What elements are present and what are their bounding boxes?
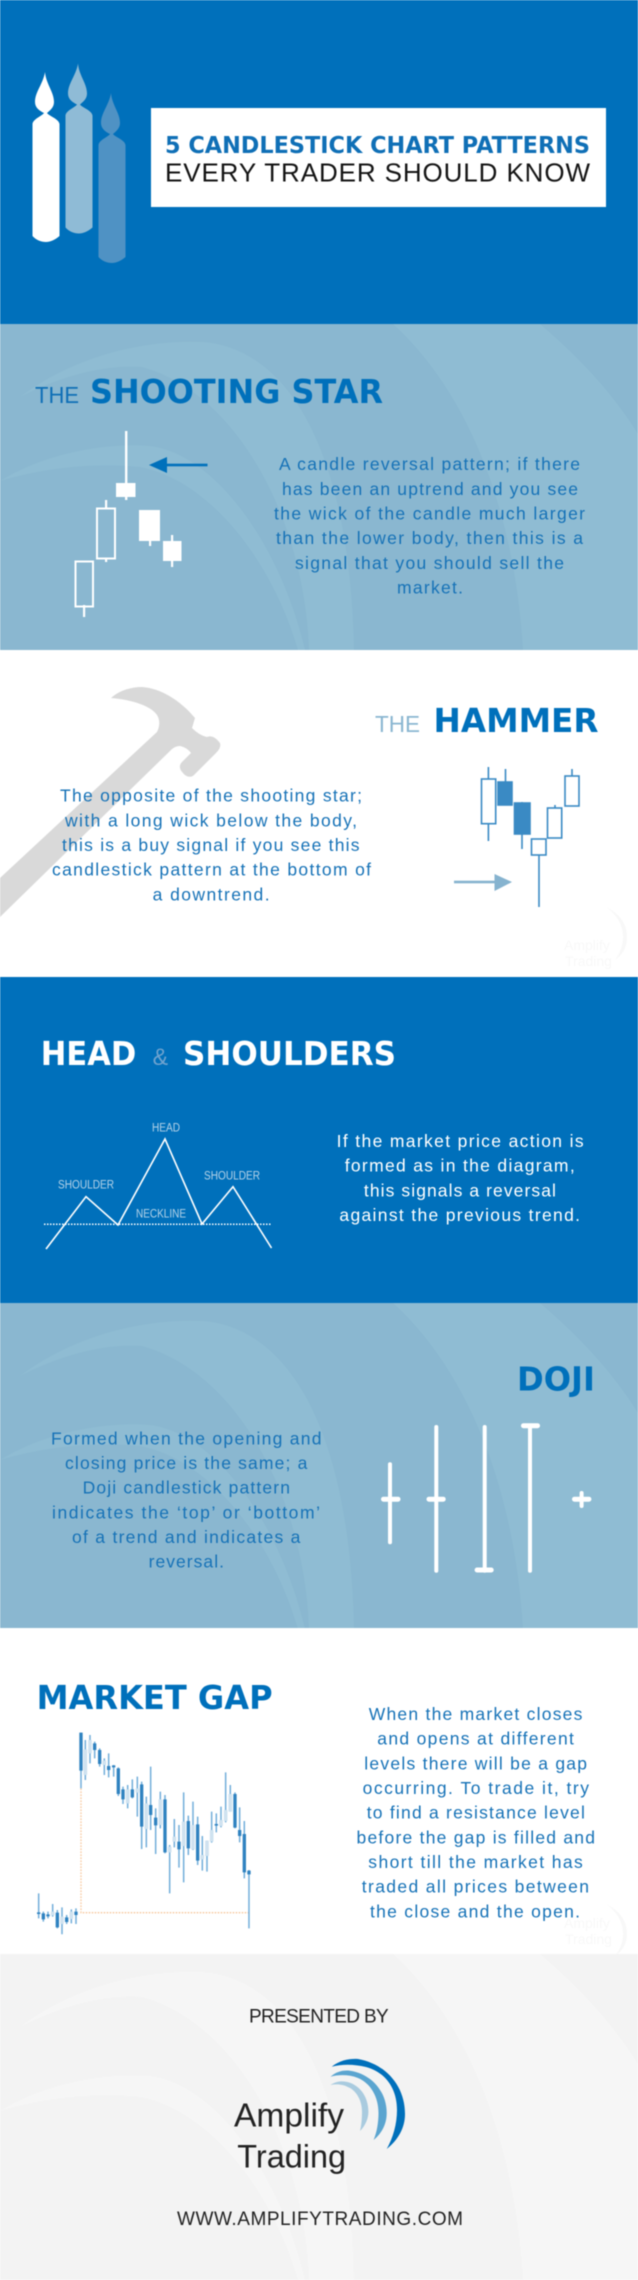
watermark: amplify logo: Trading xyxy=(565,953,612,969)
chart: doji candles xyxy=(381,1423,591,1573)
text: doji description: reversal. xyxy=(149,1552,224,1572)
watermark: amplify logo: Amplify xyxy=(564,1915,610,1931)
text: market gap description: to find a resistance level xyxy=(367,1803,585,1823)
panel: header xyxy=(0,0,638,324)
text: head and shoulders description: formed as in the diagram, xyxy=(345,1156,575,1176)
text: head and shoulders description: against the previous trend. xyxy=(339,1205,580,1225)
heading: head and shoulders: & xyxy=(153,1044,168,1071)
heading: market gap: MARKET GAP xyxy=(37,1678,273,1717)
heading: head and shoulders: HEAD xyxy=(41,1034,136,1073)
icon: hammer xyxy=(0,687,220,917)
panel: the hammer xyxy=(0,650,638,977)
label: left shoulder: SHOULDER xyxy=(58,1180,114,1192)
text: website url: WWW.AMPLIFYTRADING.COM xyxy=(177,2209,463,2230)
watermark: amplify logo: Trading xyxy=(565,1931,612,1947)
title box xyxy=(151,108,606,207)
panel: market gap xyxy=(0,1628,638,1956)
text: shooting star description: the wick of the candle much larger xyxy=(274,504,585,524)
watermark: amplify logo: Amplify xyxy=(564,937,610,953)
chart: shooting star candles xyxy=(76,431,182,617)
arrow: pointing at hammer xyxy=(454,874,512,891)
heading: the hammer: THE xyxy=(375,711,420,737)
text: hammer description: a downtrend. xyxy=(153,884,270,904)
text: shooting star description: A candle reversal pattern; if there xyxy=(279,454,580,474)
text: presented by: PRESENTED BY xyxy=(249,2007,389,2028)
label: right shoulder: SHOULDER xyxy=(204,1171,260,1183)
text: shooting star description: has been an uptrend and you see xyxy=(282,479,578,499)
text: head and shoulders description: this signals a reversal xyxy=(364,1180,556,1200)
title box: EVERY TRADER SHOULD KNOW xyxy=(165,158,590,188)
text: market gap description: levels there will be a gap xyxy=(364,1753,587,1773)
text: shooting star description xyxy=(274,454,585,598)
panel: head and shoulders xyxy=(0,977,638,1303)
watermark: amplify logo xyxy=(564,1904,627,1956)
text: hammer description: candlestick pattern at the bottom of xyxy=(52,860,371,880)
logo: amplify trading: Trading xyxy=(237,2139,346,2175)
text: head and shoulders description xyxy=(337,1131,584,1225)
text: market gap description: the close and the open. xyxy=(370,1901,580,1921)
panel: doji xyxy=(0,1303,638,1629)
text: market gap description: traded all prices between xyxy=(362,1877,589,1897)
text: shooting star description: market. xyxy=(397,578,463,598)
text: market gap description: When the market closes xyxy=(369,1704,583,1724)
heading: the hammer: HAMMER xyxy=(434,701,598,740)
logo: amplify trading xyxy=(234,2059,405,2175)
watermark: amplify logo xyxy=(564,907,627,969)
arrow: pointing at shooting star xyxy=(149,457,208,473)
chart: hammer candles xyxy=(482,767,579,907)
text: market gap description: occurring. To trade it, try xyxy=(363,1778,589,1798)
text: shooting star description: signal that you should sell the xyxy=(295,553,564,573)
label: head: HEAD xyxy=(152,1123,180,1135)
heading: head and shoulders: SHOULDERS xyxy=(183,1034,396,1073)
text: hammer description xyxy=(52,786,371,904)
heading: the shooting star: THE xyxy=(35,382,79,408)
icon: three candles xyxy=(32,64,126,263)
chart: head and shoulders diagram xyxy=(44,1123,272,1249)
chart: market gap candlesticks xyxy=(39,1733,249,1934)
text: market gap description: and opens at different xyxy=(377,1729,574,1749)
panel: footer xyxy=(0,1954,638,2280)
heading: the shooting star: SHOOTING STAR xyxy=(90,372,383,411)
text: doji description: indicates the ‘top’ or ‘bottom’ xyxy=(52,1502,320,1522)
text: hammer description: with a long wick below the body, xyxy=(64,810,357,830)
text: doji description: closing price is the same; a xyxy=(65,1453,308,1473)
panel: the shooting star xyxy=(0,324,638,650)
text: hammer description: The opposite of the shooting star; xyxy=(60,786,362,806)
text: shooting star description: than the lower body, then this is a xyxy=(276,528,583,548)
text: doji description: of a trend and indicates a xyxy=(72,1527,301,1547)
title box: 5 CANDLESTICK CHART PATTERNS xyxy=(165,132,590,159)
text: head and shoulders description: If the market price action is xyxy=(337,1131,584,1151)
text: hammer description: this is a buy signal if you see this xyxy=(62,835,360,855)
text: market gap description: before the gap is filled and xyxy=(356,1827,595,1847)
label: neckline: NECKLINE xyxy=(136,1209,186,1221)
text: doji description: Formed when the opening and xyxy=(51,1428,322,1448)
logo: amplify trading: Amplify xyxy=(234,2098,344,2135)
text: doji description xyxy=(51,1428,322,1572)
heading: doji: DOJI xyxy=(517,1360,595,1399)
text: market gap description xyxy=(356,1704,595,1921)
text: market gap description: short till the market has xyxy=(368,1852,583,1872)
text: doji description: Doji candlestick pattern xyxy=(83,1478,290,1498)
